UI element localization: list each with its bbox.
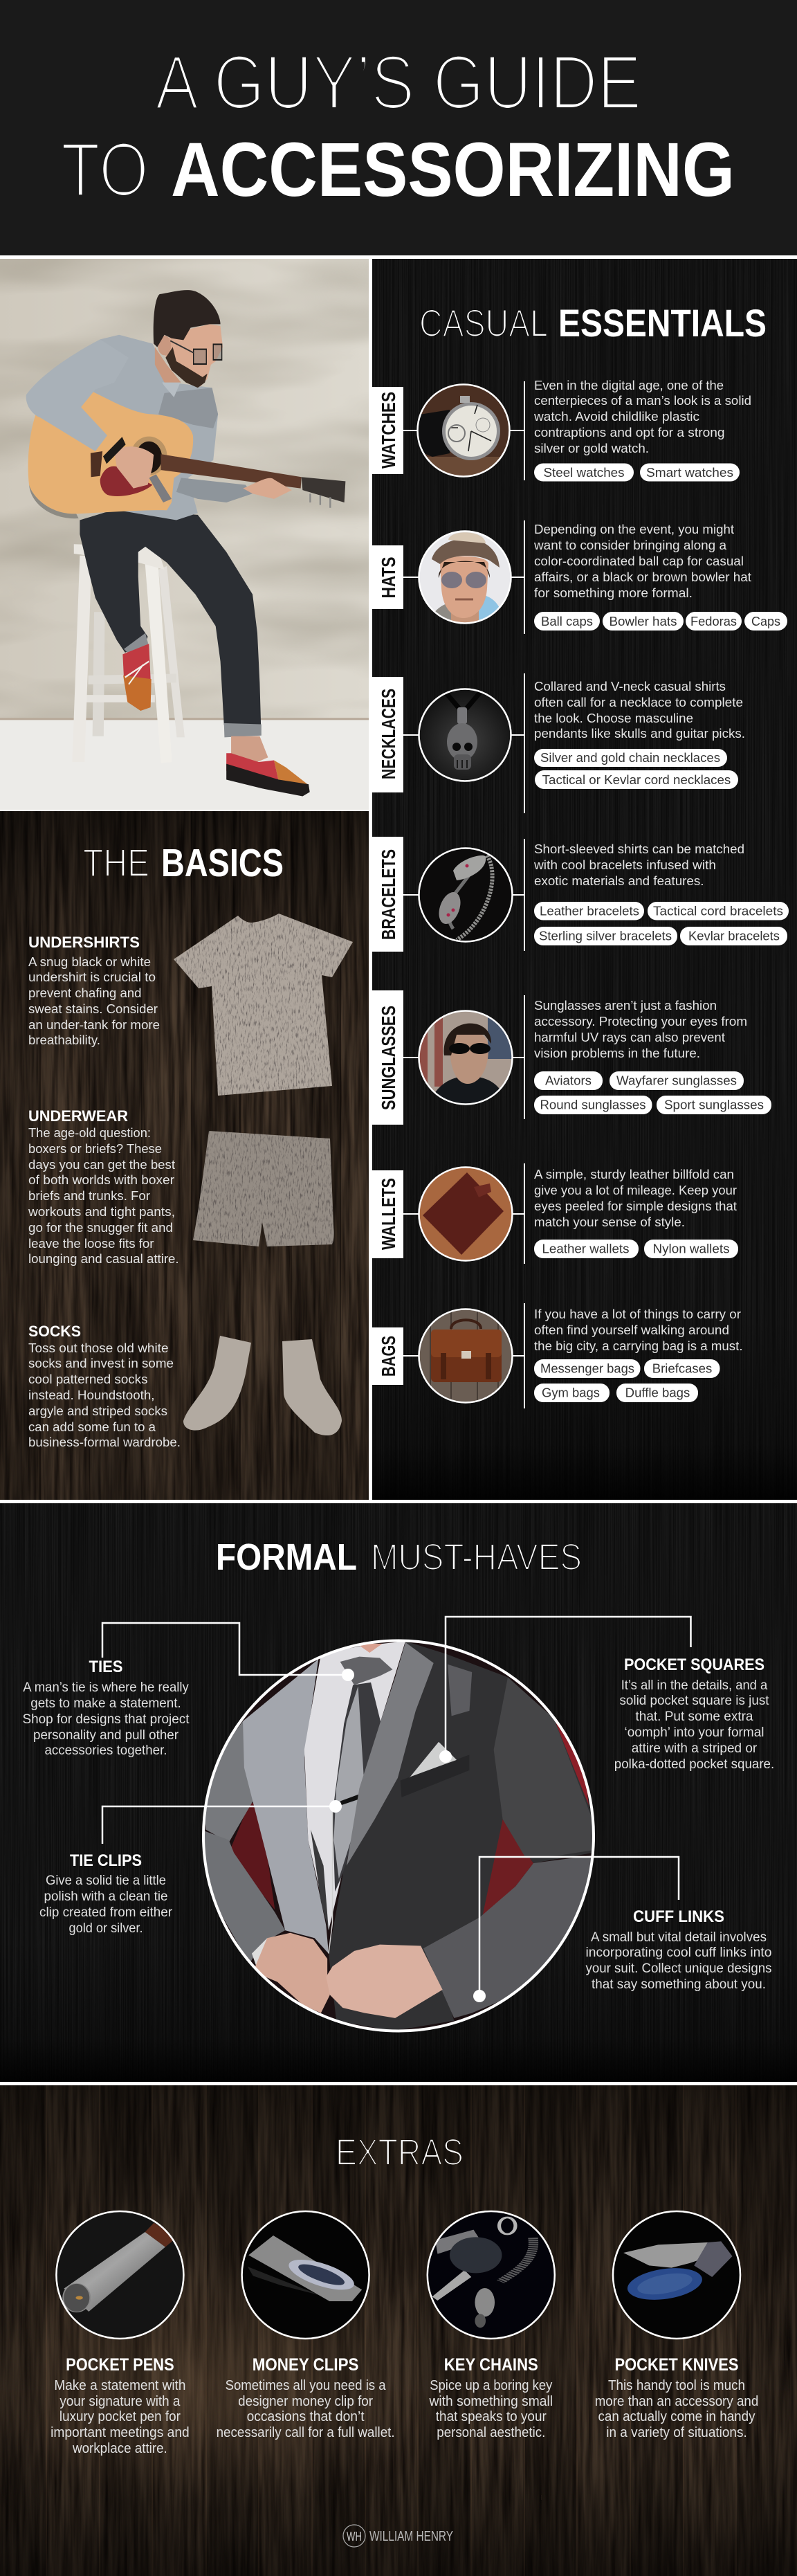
text: pocket knives: can actually come in handy bbox=[598, 2409, 755, 2424]
text: hats bbox=[533, 522, 751, 600]
heading: casual essentials: CASUAL bbox=[419, 301, 548, 345]
label: wallets bbox=[372, 1170, 403, 1258]
title bbox=[61, 40, 735, 212]
text: key chains: with something small bbox=[429, 2394, 553, 2409]
text: sunglasses bbox=[534, 998, 747, 1060]
text: pocket pens: your signature with a bbox=[59, 2394, 181, 2409]
item: bags bbox=[372, 1305, 743, 1405]
text block: socks: cool patterned socks bbox=[28, 1372, 148, 1386]
tags: sunglasses bbox=[534, 1071, 771, 1114]
tags: necklaces: Silver and gold chain necklaces bbox=[540, 750, 720, 765]
logo: William Henry: WH bbox=[347, 2530, 362, 2543]
text: necklaces bbox=[534, 679, 745, 741]
callout: tie clips bbox=[39, 1851, 172, 1936]
tags: necklaces: Tactical or Kevlar cord necklaces bbox=[542, 772, 731, 787]
text block: undershirts: undershirt is crucial to bbox=[28, 970, 156, 984]
tags: bracelets bbox=[534, 902, 789, 945]
item: pocket pens bbox=[51, 2211, 190, 2456]
callout lines and dots bbox=[102, 1617, 690, 2002]
text block: undershirts: prevent chafing and bbox=[28, 986, 141, 1000]
label: bags: BAGS bbox=[378, 1336, 399, 1377]
label: wallets: WALLETS bbox=[378, 1178, 399, 1250]
tags: bracelets: Sterling silver bracelets bbox=[539, 929, 672, 943]
tags: hats: Bowler hats bbox=[609, 614, 677, 628]
tags: hats: Caps bbox=[751, 614, 780, 628]
text: pocket knives: POCKET KNIVES bbox=[614, 2355, 739, 2375]
heading: the basics bbox=[83, 841, 284, 885]
photo: watch bbox=[415, 381, 512, 478]
text: sunglasses: harmful UV rays can also prevent bbox=[534, 1030, 725, 1044]
text: money clips: occasions that don’t bbox=[247, 2409, 365, 2424]
tags: wallets bbox=[534, 1240, 738, 1258]
text: wallets: eyes peeled for simple designs that bbox=[534, 1199, 737, 1213]
callout: ties: TIES bbox=[89, 1658, 123, 1676]
callout: pocket squares: that. Put some extra bbox=[635, 1709, 753, 1724]
callout: ties: accessories together. bbox=[44, 1743, 167, 1758]
tags: wallets: Nylon wallets bbox=[653, 1242, 729, 1255]
item: watches bbox=[372, 378, 751, 482]
heading: formal must-haves: FORMAL bbox=[216, 1536, 357, 1578]
text: necklaces: pendants like skulls and guitar picks. bbox=[534, 726, 745, 741]
text block: underwear: of both worlds with boxer bbox=[28, 1172, 174, 1187]
header panel bbox=[0, 0, 797, 255]
tags: sunglasses: Aviators bbox=[545, 1073, 592, 1088]
panel: the basics bbox=[0, 811, 369, 1500]
callout: tie clips: Give a solid tie a little bbox=[46, 1873, 166, 1888]
text: key chains: that speaks to your bbox=[436, 2409, 547, 2424]
callout: cuff links: your suit. Collect unique designs bbox=[585, 1961, 772, 1976]
text: watches: silver or gold watch. bbox=[534, 441, 649, 455]
text: necklaces: Collared and V-neck casual shirts bbox=[534, 679, 726, 693]
label: watches: WATCHES bbox=[378, 392, 399, 469]
callout: pocket squares: ‘oomph’ into your formal bbox=[624, 1725, 764, 1740]
text: pocket pens: important meetings and bbox=[51, 2425, 190, 2440]
label: bracelets: BRACELETS bbox=[378, 849, 399, 940]
guitar bbox=[28, 390, 345, 518]
text: necklaces: the look. Choose masculine bbox=[534, 711, 693, 725]
text block: socks: can add some fun to a bbox=[28, 1419, 156, 1434]
callout: tie clips: polish with a clean tie bbox=[44, 1889, 167, 1904]
photo: leather bag bbox=[415, 1305, 515, 1405]
text: money clips bbox=[217, 2355, 395, 2440]
text block: socks: argyle and striped socks bbox=[28, 1404, 167, 1418]
heading: the basics: THE bbox=[83, 841, 149, 885]
photo: wallet bbox=[415, 1163, 515, 1263]
tags: sunglasses: Round sunglasses bbox=[540, 1098, 646, 1112]
text: money clips: Sometimes all you need is a bbox=[226, 2378, 386, 2393]
item: money clips bbox=[217, 2211, 395, 2440]
text: sunglasses: vision problems in the future. bbox=[534, 1046, 700, 1060]
callout: cuff links: CUFF LINKS bbox=[633, 1907, 724, 1926]
callout: pocket squares: It’s all in the details, and a bbox=[621, 1678, 767, 1693]
tags: bracelets: Tactical cord bracelets bbox=[653, 904, 783, 918]
tags: hats bbox=[534, 612, 787, 631]
text block: socks: business-formal wardrobe. bbox=[28, 1435, 181, 1449]
text: wallets: match your sense of style. bbox=[534, 1215, 685, 1229]
text block: underwear bbox=[28, 1107, 179, 1266]
callout: pocket squares bbox=[614, 1656, 774, 1772]
tags: watches: Steel watches bbox=[544, 465, 624, 480]
text: key chains: personal aesthetic. bbox=[437, 2425, 545, 2440]
label: hats: HATS bbox=[378, 556, 399, 598]
text block: undershirts bbox=[28, 934, 160, 1047]
item: wallets bbox=[372, 1163, 738, 1263]
photo: skull pendant bbox=[418, 688, 512, 782]
callout: ties bbox=[22, 1658, 190, 1758]
callout: tie clips: gold or silver. bbox=[69, 1921, 143, 1936]
callout: pocket squares: polka-dotted pocket square. bbox=[614, 1757, 774, 1772]
heading: the basics: BASICS bbox=[161, 841, 284, 885]
text: sunglasses: Sunglasses aren’t just a fashion bbox=[534, 998, 717, 1013]
text: bags: the big city, a carrying bag is a must. bbox=[534, 1339, 743, 1353]
tags: hats: Ball caps bbox=[541, 614, 593, 628]
label: hats bbox=[372, 545, 403, 609]
icon: socks silhouette bbox=[183, 1336, 342, 1435]
heading: casual essentials: ESSENTIALS bbox=[558, 301, 767, 345]
label: necklaces: NECKLACES bbox=[378, 689, 399, 779]
shirt bbox=[79, 335, 253, 520]
text: necklaces: often call for a necklace to complete bbox=[534, 695, 743, 709]
item: key chains bbox=[426, 2211, 558, 2440]
callout: tie clips: TIE CLIPS bbox=[70, 1851, 142, 1870]
heading: formal must-haves bbox=[216, 1536, 582, 1578]
text: watches: Even in the digital age, one of the bbox=[534, 378, 724, 392]
text: hats: want to consider bringing along a bbox=[533, 538, 727, 552]
text: bracelets: Short-sleeved shirts can be matched bbox=[534, 842, 744, 856]
text: hats: for something more formal. bbox=[534, 586, 693, 600]
callout: tie clips: clip created from either bbox=[39, 1905, 172, 1920]
tags: bags: Duffle bags bbox=[625, 1386, 690, 1399]
text block: underwear: UNDERWEAR bbox=[28, 1107, 128, 1125]
callout: cuff links: A small but vital detail involves bbox=[591, 1930, 767, 1945]
logo: William Henry: WILLIAM HENRY bbox=[369, 2529, 453, 2544]
text block: socks: instead. Houndstooth, bbox=[28, 1388, 154, 1402]
text: pocket pens bbox=[51, 2355, 190, 2456]
heading: casual essentials bbox=[419, 301, 767, 345]
text: watches: centerpieces of a man’s look is a solid bbox=[534, 393, 751, 408]
photo: pocket pen bbox=[55, 2211, 187, 2343]
label: watches bbox=[372, 387, 403, 474]
text: pocket knives bbox=[595, 2355, 758, 2440]
label: bags bbox=[372, 1327, 403, 1385]
text block: socks: socks and invest in some bbox=[28, 1356, 174, 1370]
callout: cuff links: incorporating cool cuff links into bbox=[585, 1945, 772, 1960]
text: wallets bbox=[534, 1167, 737, 1229]
text: money clips: MONEY CLIPS bbox=[253, 2355, 358, 2375]
photo: suit jacket bbox=[201, 1633, 602, 2038]
text: pocket knives: more than an accessory and bbox=[595, 2394, 758, 2409]
head bbox=[154, 290, 223, 388]
label: sunglasses bbox=[372, 990, 403, 1125]
jeans cuffs bbox=[124, 633, 262, 737]
title: TO bbox=[61, 127, 149, 212]
text block: underwear: workouts and tight pants, bbox=[28, 1204, 175, 1219]
text block: underwear: briefs and trunks. For bbox=[28, 1188, 150, 1203]
text: hats: color-coordinated ball cap for casual bbox=[534, 554, 744, 568]
item: sunglasses bbox=[372, 990, 771, 1125]
callout: cuff links bbox=[585, 1907, 772, 1992]
text: bracelets: exotic materials and features. bbox=[534, 873, 704, 888]
tags: bracelets: Leather bracelets bbox=[540, 904, 639, 918]
icon: undershirt silhouette bbox=[174, 914, 353, 1096]
text: pocket pens: workplace attire. bbox=[72, 2441, 167, 2456]
photo: pocket knife bbox=[612, 2211, 743, 2343]
text: pocket pens: luxury pocket pen for bbox=[59, 2409, 181, 2424]
tags: bags: Gym bags bbox=[542, 1386, 600, 1399]
tags: sunglasses: Wayfarer sunglasses bbox=[616, 1073, 737, 1088]
icon: shorts silhouette bbox=[193, 1131, 334, 1246]
text: watches: watch. Avoid childlike plastic bbox=[533, 409, 699, 424]
callout: pocket squares: POCKET SQUARES bbox=[624, 1656, 764, 1674]
item: hats bbox=[372, 522, 787, 631]
tags: watches: Smart watches bbox=[646, 465, 733, 480]
photo: man in hat bbox=[418, 530, 512, 624]
text: bags: If you have a lot of things to carry or bbox=[534, 1307, 741, 1321]
text block: underwear: The age-old question: bbox=[28, 1125, 151, 1140]
panel: formal must-haves bbox=[0, 1503, 797, 2082]
text: watches bbox=[533, 378, 751, 455]
title: ACCESSORIZING bbox=[171, 127, 735, 212]
item: pocket knives bbox=[595, 2211, 758, 2440]
text: bags: often find yourself walking around bbox=[534, 1323, 729, 1337]
text: hats: affairs, or a black or brown bowler hat bbox=[534, 570, 751, 584]
tags: hats: Fedoras bbox=[690, 614, 737, 628]
text block: undershirts: breathability. bbox=[28, 1033, 100, 1047]
logo: William Henry bbox=[343, 2525, 453, 2547]
tags: sunglasses: Sport sunglasses bbox=[664, 1098, 764, 1112]
photo: key chain bbox=[426, 2211, 558, 2343]
text block: undershirts: sweat stains. Consider bbox=[28, 1001, 158, 1016]
label: sunglasses: SUNGLASSES bbox=[378, 1006, 399, 1110]
near arm bbox=[26, 339, 107, 451]
tags: bracelets: Kevlar bracelets bbox=[688, 929, 780, 943]
text block: socks: SOCKS bbox=[28, 1323, 81, 1340]
tags: necklaces bbox=[534, 749, 738, 789]
text: pocket knives: in a variety of situations. bbox=[606, 2425, 747, 2440]
callout: ties: Shop for designs that project bbox=[22, 1712, 190, 1727]
photo: man in sunglasses bbox=[415, 1007, 515, 1107]
text block: underwear: go for the snugger fit and bbox=[28, 1220, 173, 1235]
callout: ties: A man’s tie is where he really bbox=[23, 1680, 189, 1695]
item: bracelets bbox=[372, 837, 789, 952]
text: key chains: Spice up a boring key bbox=[430, 2378, 552, 2393]
panel: hero photo of man with guitar bbox=[0, 259, 369, 811]
text block: socks: Toss out those old white bbox=[28, 1341, 169, 1355]
text: key chains: KEY CHAINS bbox=[444, 2355, 538, 2375]
text block: underwear: lounging and casual attire. bbox=[28, 1251, 179, 1266]
tags: bags bbox=[534, 1359, 720, 1402]
callout: pocket squares: solid pocket square is just bbox=[620, 1693, 769, 1708]
text: sunglasses: accessory. Protecting your eyes from bbox=[534, 1014, 747, 1028]
text: money clips: designer money clip for bbox=[238, 2394, 373, 2409]
text block: socks bbox=[28, 1323, 181, 1449]
item: necklaces bbox=[372, 677, 745, 792]
label: necklaces bbox=[372, 677, 403, 792]
text: wallets: A simple, sturdy leather billfold can bbox=[534, 1167, 734, 1181]
text: wallets: give you a lot of mileage. Keep your bbox=[534, 1183, 737, 1197]
text: bags bbox=[534, 1307, 743, 1353]
shoes bbox=[122, 644, 310, 797]
title: A GUY’S GUIDE bbox=[155, 40, 641, 125]
label: bracelets bbox=[372, 837, 403, 952]
text block: underwear: leave the loose fits for bbox=[28, 1236, 154, 1251]
text: key chains bbox=[429, 2355, 553, 2440]
panel: casual essentials bbox=[372, 259, 797, 1500]
text: money clips: necessarily call for a full wallet. bbox=[217, 2425, 395, 2440]
jeans bbox=[80, 509, 261, 725]
tags: wallets: Leather wallets bbox=[542, 1242, 630, 1255]
text: watches: contraptions and opt for a strong bbox=[534, 425, 725, 439]
text block: underwear: days you can get the best bbox=[28, 1157, 175, 1172]
text block: undershirts: an under-tank for more bbox=[28, 1017, 160, 1032]
callout: pocket squares: attire with a striped or bbox=[632, 1741, 758, 1756]
tags: watches bbox=[534, 464, 740, 482]
text: pocket pens: POCKET PENS bbox=[66, 2355, 174, 2375]
text: bracelets bbox=[533, 842, 744, 888]
panel: extras bbox=[0, 2085, 797, 2576]
photo: money clip bbox=[241, 2211, 372, 2343]
tags: bags: Briefcases bbox=[652, 1361, 712, 1376]
callout: cuff links: that say something about you. bbox=[592, 1977, 766, 1992]
photo: bracelet bbox=[415, 844, 515, 945]
callout: ties: personality and pull other bbox=[33, 1727, 178, 1743]
text: hats: Depending on the event, you might bbox=[534, 522, 734, 536]
stool bbox=[73, 544, 185, 738]
text: pocket knives: This handy tool is much bbox=[608, 2378, 745, 2393]
callout: ties: gets to make a statement. bbox=[30, 1696, 181, 1711]
text: pocket pens: Make a statement with bbox=[54, 2378, 185, 2393]
text block: undershirts: UNDERSHIRTS bbox=[28, 934, 140, 951]
hands bbox=[114, 446, 292, 499]
text: bracelets: with cool bracelets infused with bbox=[533, 858, 716, 872]
heading: formal must-haves: MUST-HAVES bbox=[371, 1536, 582, 1578]
text block: underwear: boxers or briefs? These bbox=[28, 1141, 162, 1156]
heading: extras: EXTRAS bbox=[336, 2132, 464, 2173]
tags: bags: Messenger bags bbox=[540, 1361, 634, 1376]
text block: undershirts: A snug black or white bbox=[28, 954, 151, 969]
